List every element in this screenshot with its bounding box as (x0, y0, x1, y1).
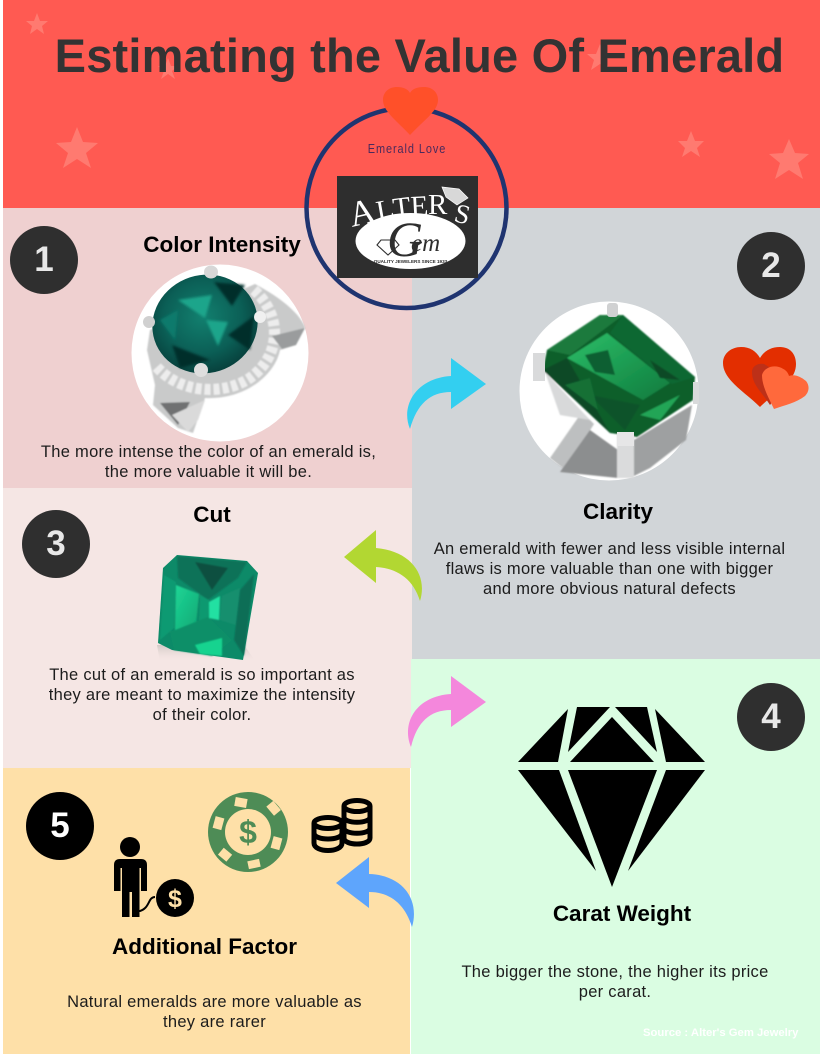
text: clarity: flaws is more valuable than one with bigger (446, 560, 773, 578)
arrow: lime to cut (344, 530, 422, 601)
heading: cut: Cut (193, 502, 231, 527)
logo: L (374, 193, 397, 228)
source note: Source : Alter's Gem Jewelry (643, 1027, 798, 1039)
text: clarity: An emerald with fewer and less visible internal (434, 540, 785, 558)
icon: casino chip: $ (239, 814, 257, 850)
icon: person chained to dollar (114, 837, 194, 917)
icon: person chained to dollar: $ (168, 885, 182, 913)
image: round emerald ring (132, 264, 308, 442)
text: carat weight: The bigger the stone, the higher its price (461, 963, 769, 981)
number badge 4 (737, 683, 805, 751)
number badge 1: 1 (34, 240, 54, 279)
heading: additional factor: Additional Factor (112, 934, 297, 959)
panel: clarity (412, 208, 820, 659)
text: additional factor: Natural emeralds are more valuable as (67, 993, 362, 1011)
heading: carat weight: Carat Weight (553, 901, 691, 926)
logo: G (387, 211, 423, 267)
number badge 4: 4 (761, 697, 781, 736)
logo: R (428, 189, 448, 221)
panel: header (3, 0, 820, 208)
image: cut emerald (157, 555, 258, 660)
image: emerald cut ring (520, 302, 698, 480)
arrow: blue to additional factor (336, 857, 414, 927)
text: additional factor (67, 993, 362, 1031)
logo: A (345, 190, 379, 235)
decorative stars (26, 14, 809, 179)
arrow: pink to carat (408, 676, 486, 747)
number badge 3: 3 (46, 524, 66, 563)
logo: T (391, 191, 413, 225)
logo: S (452, 198, 473, 230)
panel: color intensity (3, 208, 412, 488)
icon: diamond (518, 707, 705, 887)
text: additional factor: they are rarer (163, 1013, 266, 1031)
text: clarity (434, 540, 785, 598)
logo: E (410, 190, 429, 223)
text: carat weight: per carat. (579, 983, 651, 1001)
arrow: blue to clarity (407, 358, 486, 429)
logo: QUALITY JEWELERS SINCE 1933 (374, 259, 448, 264)
logo: em (411, 230, 440, 257)
number badge 5 (26, 792, 94, 860)
text: cut: of their color. (153, 706, 251, 724)
icon: two hearts (723, 347, 808, 409)
heading: clarity: Clarity (583, 499, 653, 524)
number badge 3 (22, 510, 90, 578)
panel: cut (3, 488, 412, 768)
ring (304, 108, 509, 310)
logo (337, 176, 478, 278)
panel: additional factor (3, 768, 410, 1054)
heading: color intensity: Color Intensity (143, 232, 301, 257)
emblem: ring, heart and logo (304, 87, 509, 310)
text: color intensity: The more intense the color of an emerald is, (41, 443, 376, 461)
text: clarity: and more obvious natural defects (483, 580, 736, 598)
number badge 2: 2 (761, 246, 781, 285)
number badge 2 (737, 232, 805, 300)
panel: carat weight (411, 659, 820, 1054)
text: cut (49, 666, 355, 724)
text: cut: they are meant to maximize the intensity (49, 686, 355, 704)
number badge 1 (10, 226, 78, 294)
icon: coin stacks (312, 798, 372, 853)
text: cut: The cut of an emerald is so important as (49, 666, 355, 684)
text: carat weight (461, 963, 769, 1001)
text: color intensity: the more valuable it will be. (105, 463, 312, 481)
title: Estimating the Value Of Emerald (55, 29, 784, 82)
number badge 5: 5 (50, 806, 70, 845)
icon: casino chip (208, 792, 288, 872)
icon: heart (383, 87, 438, 135)
text: color intensity (41, 443, 376, 481)
brand text: Emerald Love (368, 141, 446, 156)
